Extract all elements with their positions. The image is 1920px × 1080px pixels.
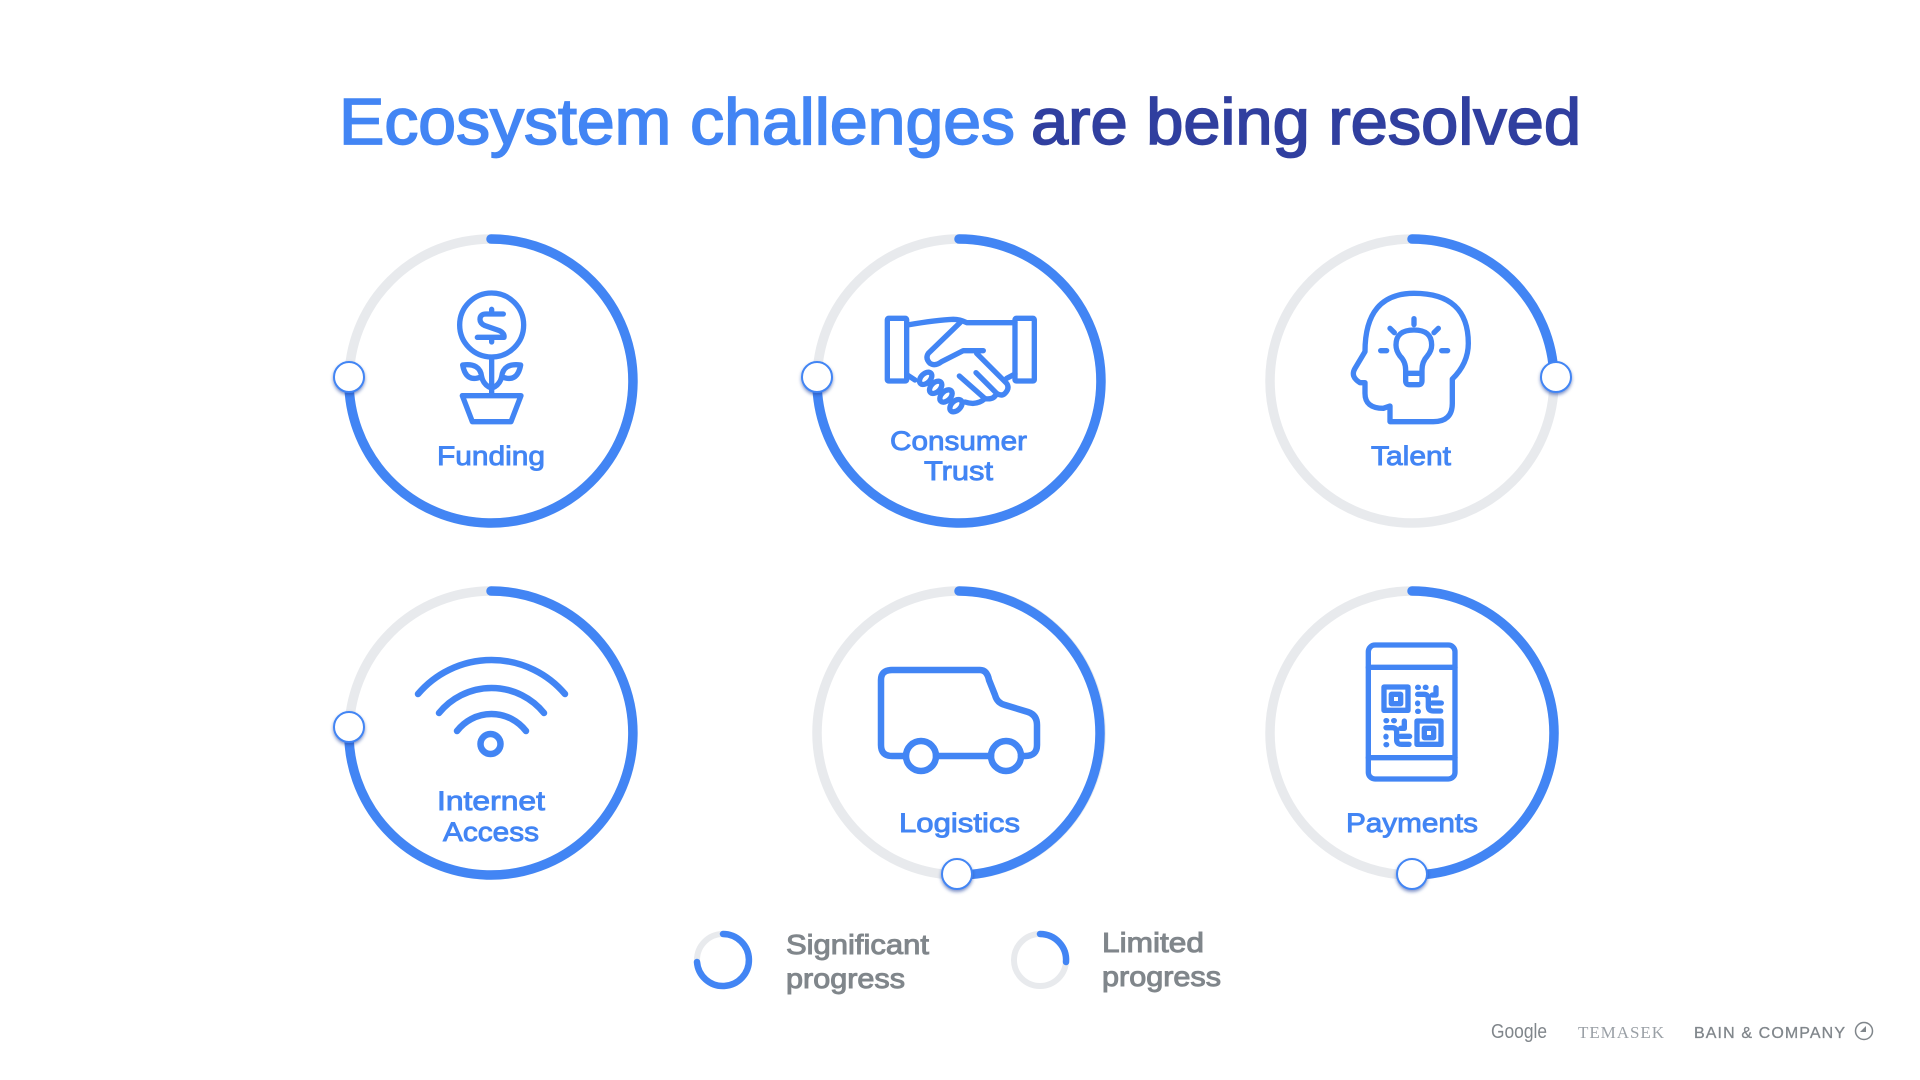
label: internet access: Internet — [437, 786, 546, 816]
footer logos: Google — [1491, 1021, 1547, 1043]
label: internet access: Access — [443, 817, 539, 847]
label: funding: Funding — [437, 441, 545, 471]
icon: wifi — [418, 660, 565, 754]
footer logos: TEMASEK — [1578, 1023, 1665, 1042]
icon: head with light bulb — [1353, 293, 1468, 422]
icon: handshake — [887, 318, 1034, 414]
legend: limited progress — [1014, 927, 1221, 992]
legend: limited progress: Limited — [1102, 927, 1204, 958]
label: talent: Talent — [1371, 441, 1452, 471]
legend: significant progress: progress — [786, 963, 905, 994]
panel: funding — [334, 239, 633, 523]
label: consumer trust: Consumer — [890, 426, 1027, 456]
label: consumer trust: Trust — [924, 456, 994, 486]
legend: significant progress — [697, 929, 929, 994]
label: payments: Payments — [1346, 808, 1478, 838]
legend: limited progress: progress — [1102, 961, 1221, 992]
title: are being resolved — [1031, 85, 1581, 158]
label: logistics: Logistics — [899, 808, 1020, 838]
panel: logistics — [817, 591, 1101, 889]
panel: payments — [1270, 591, 1554, 889]
label: consumer trust — [890, 426, 1027, 486]
panel: consumer trust — [802, 239, 1101, 523]
footer logos — [1491, 1021, 1872, 1043]
panel: talent — [1270, 239, 1571, 523]
footer logos: BAIN & COMPANY — [1694, 1025, 1845, 1042]
icon: truck — [881, 670, 1037, 771]
title: Ecosystem challenges — [339, 85, 1015, 158]
icon: phone with QR code — [1368, 645, 1455, 779]
legend: significant progress: Significant — [786, 929, 929, 960]
title — [339, 85, 1581, 158]
label: internet access — [437, 786, 546, 847]
icon: money plant — [460, 293, 524, 422]
panel: internet access — [334, 591, 633, 875]
